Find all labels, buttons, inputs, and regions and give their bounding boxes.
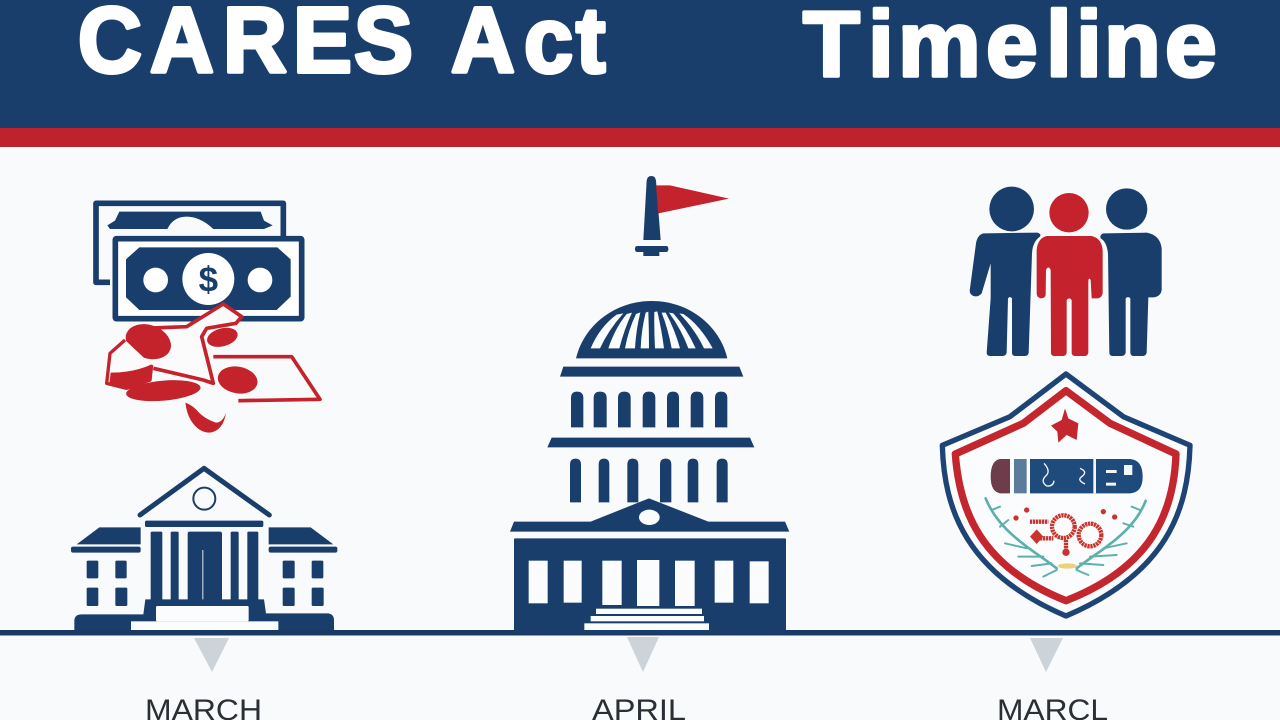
gold clasp	[1058, 563, 1077, 569]
header band	[0, 0, 1280, 149]
marker: April	[627, 637, 659, 672]
shield outline	[942, 374, 1190, 616]
red emblem	[1051, 408, 1078, 443]
right person	[1100, 188, 1162, 356]
wreath	[986, 498, 1146, 577]
pediment	[510, 498, 789, 532]
left person	[970, 187, 1040, 356]
flag on pole	[635, 176, 729, 256]
icon: money	[96, 203, 320, 433]
icon: shield badge	[942, 374, 1190, 616]
front bill	[115, 239, 302, 319]
icon: capitol	[510, 176, 789, 633]
timeline axis	[0, 630, 1280, 636]
icon: people group	[970, 187, 1162, 356]
red loose banknotes	[107, 304, 320, 433]
back bill	[96, 203, 283, 282]
red flowers	[1013, 507, 1117, 556]
dome	[576, 301, 727, 358]
icon: bank building	[71, 468, 337, 630]
marker: March 2	[1030, 638, 1063, 672]
front bill: $	[199, 261, 218, 300]
center person	[1037, 193, 1103, 356]
lower columns	[570, 459, 728, 502]
upper columns	[571, 392, 727, 427]
main hall	[514, 538, 786, 633]
banner	[991, 459, 1143, 493]
marker: March 1	[194, 638, 229, 672]
